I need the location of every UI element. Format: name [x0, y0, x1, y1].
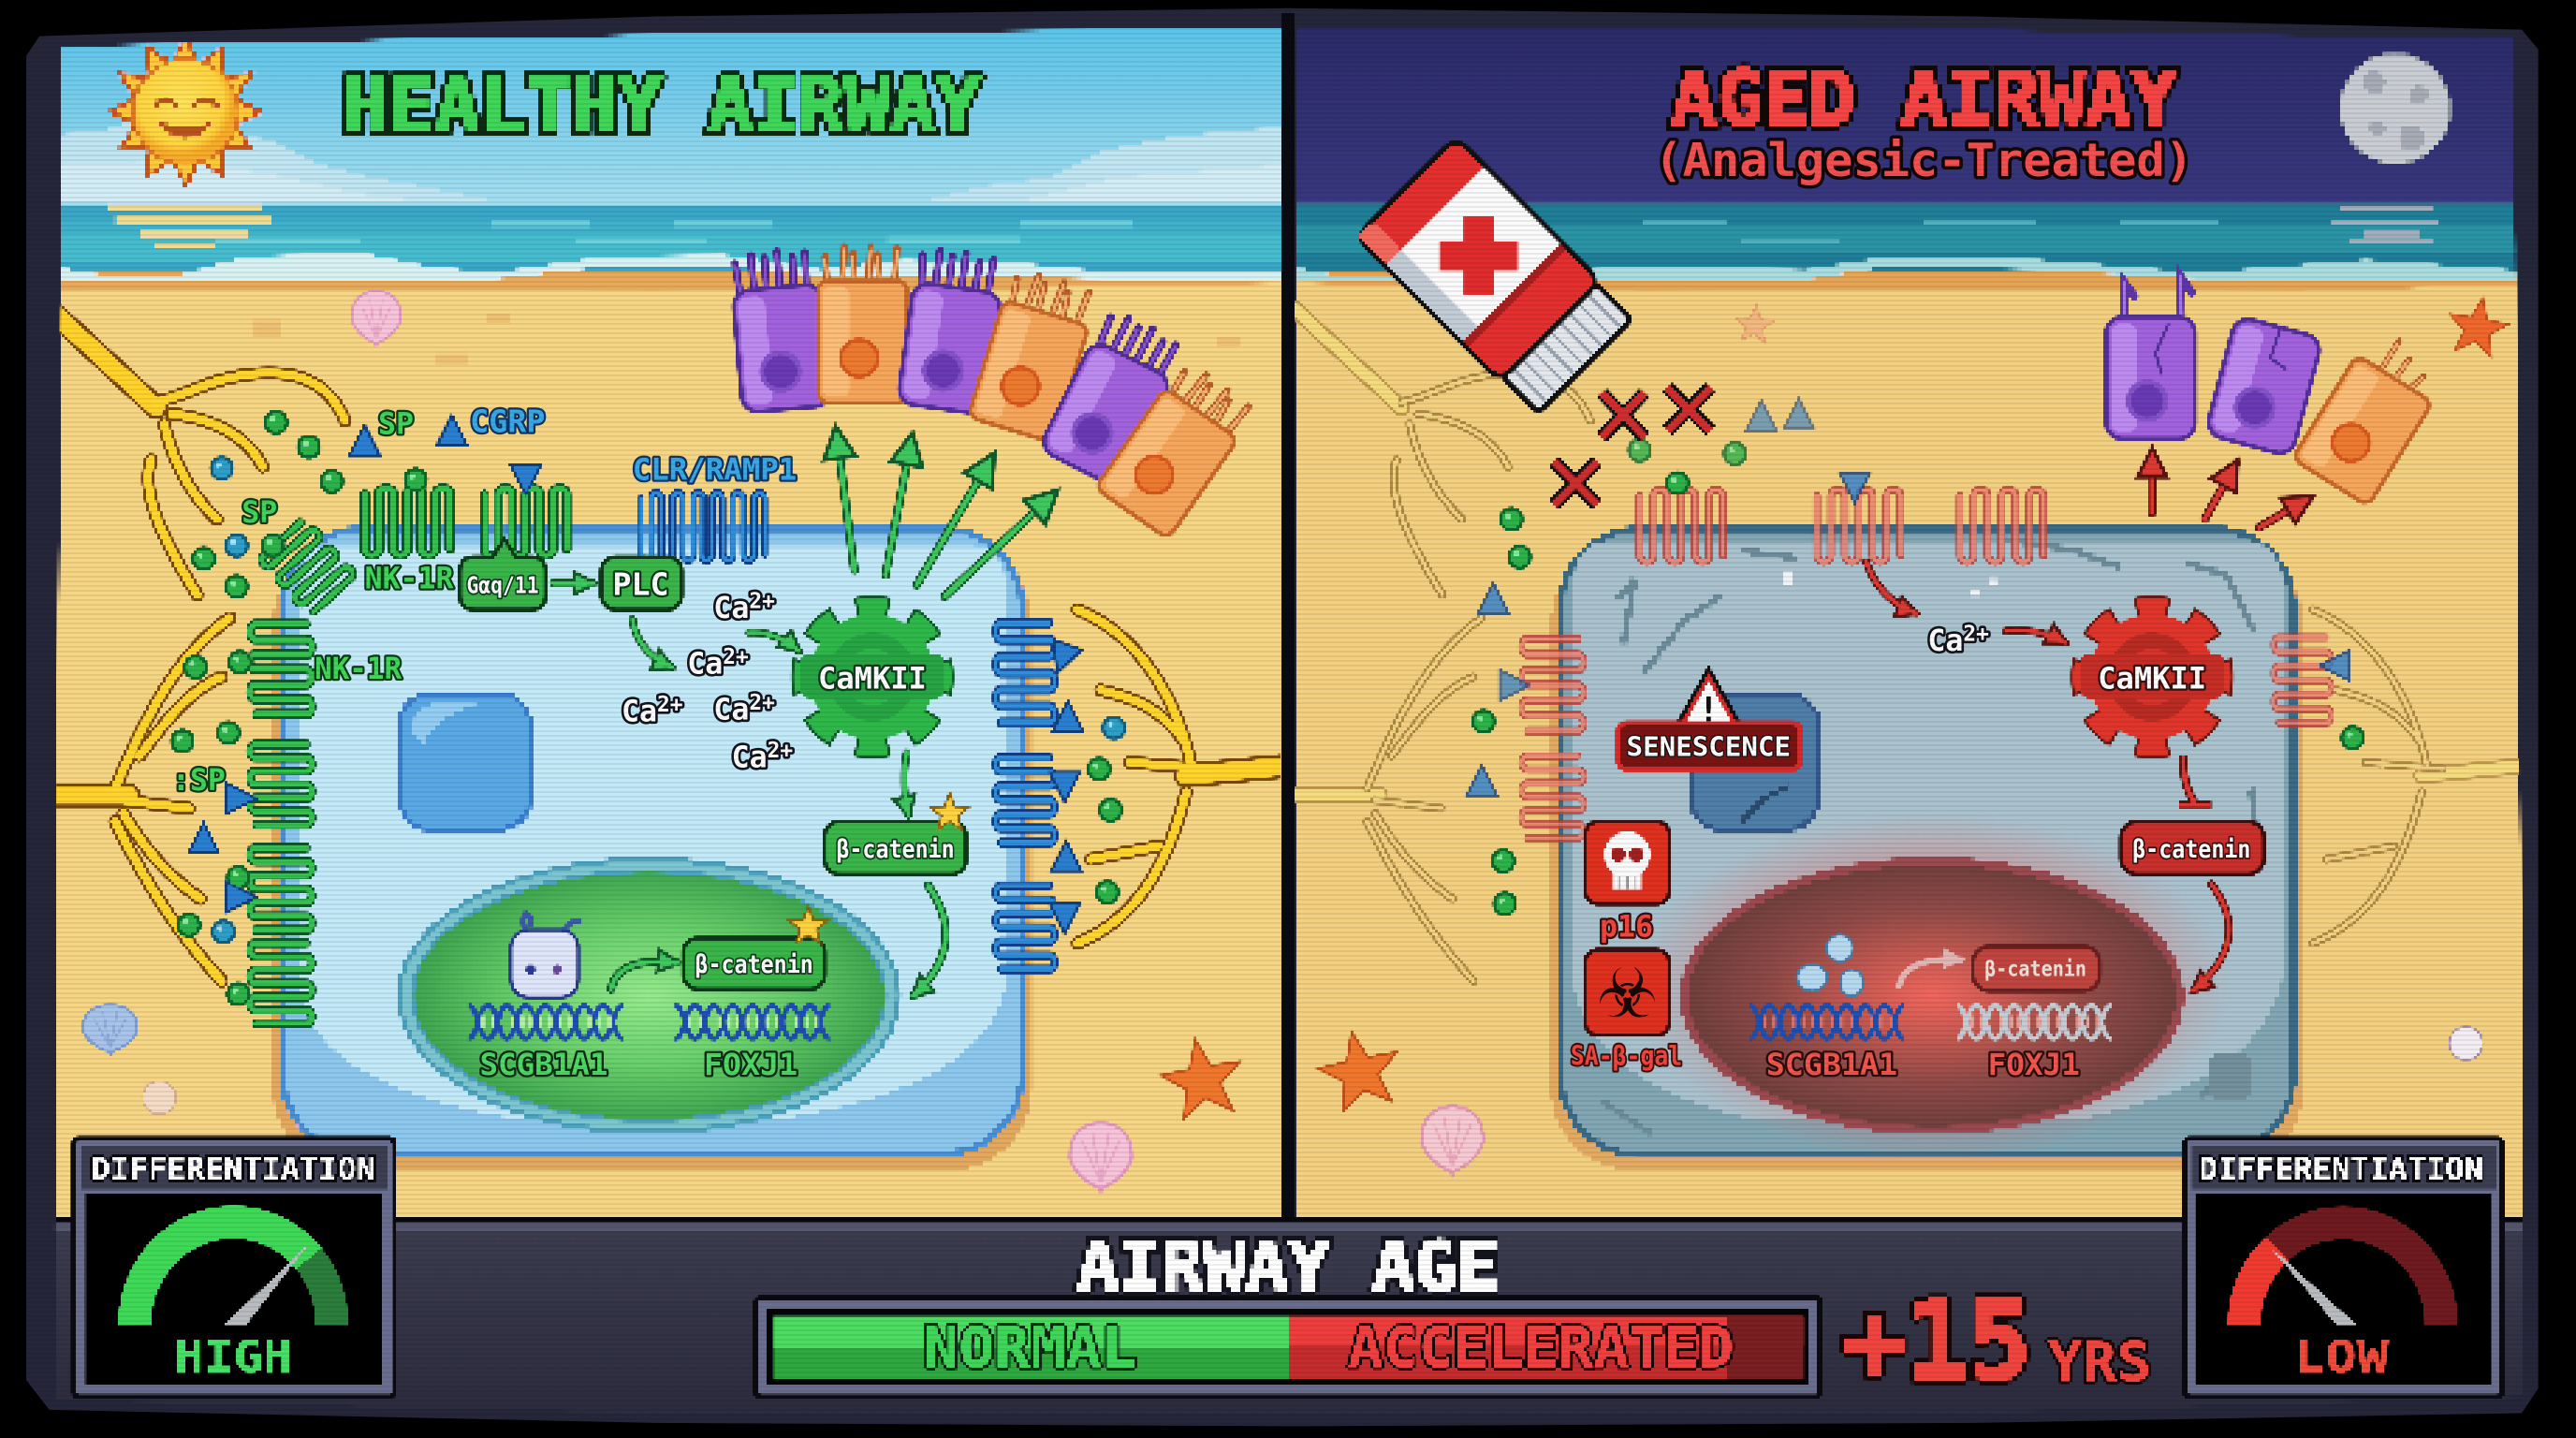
- red crosses: [1554, 388, 1710, 505]
- senescent nucleus: [1684, 861, 2180, 1131]
- sea: [33, 204, 1298, 286]
- label: PLC: PLC: [612, 565, 669, 602]
- icon: bottle of analgesic: [1356, 137, 1635, 416]
- label: NK-1R left: NK-1R: [315, 653, 402, 686]
- glow around nucleus: [1633, 812, 2231, 1160]
- icon: skull badge: [1586, 822, 1669, 903]
- label: G alpha q/11: Gαq/11: [466, 572, 539, 599]
- vacuole: [399, 694, 531, 829]
- healthy airway cell: [272, 529, 1032, 1170]
- label: NK-1R top: NK-1R: [365, 562, 454, 595]
- ciliated and club cells: [729, 246, 1257, 538]
- stat: +15: +15: [1842, 1279, 2031, 1405]
- calcium labels: Ca: [622, 695, 657, 728]
- senescent vacuole: [1690, 694, 1819, 829]
- calcium labels: 2+: [723, 645, 749, 669]
- panel: aged airway: [1290, 17, 2554, 1229]
- label: aged Ca2+: 2+: [1963, 622, 1989, 646]
- arrows: aged pathway: [1866, 562, 2229, 990]
- label: Differentiation right: DIFFERENTIATION: [2199, 1151, 2483, 1187]
- receptors: NK-1R and CLR/RAMP1: [250, 488, 1055, 1023]
- centre divider: [1281, 13, 1295, 1225]
- label: FOXJ1: FOXJ1: [704, 1049, 798, 1082]
- gauge: aged differentiation: [2185, 1138, 2502, 1397]
- gear: CaMKII: [800, 609, 944, 744]
- label: faded nuclear beta-catenin: β-catenin: [1984, 958, 2086, 982]
- label: SA-beta-gal: SA-β-gal: [1571, 1040, 1682, 1071]
- label: p16: p16: [1600, 910, 1653, 944]
- neuropeptide dots: [170, 410, 1126, 1006]
- label: CLR/RAMP1: CLR/RAMP1: [633, 453, 797, 487]
- faded receptors: [1522, 490, 2331, 838]
- CGRP triangles: [189, 416, 1083, 933]
- label: SCGB1A1: SCGB1A1: [479, 1049, 607, 1082]
- damaged cells: [2106, 276, 2451, 506]
- label: aged CaMKII: CaMKII: [2098, 662, 2206, 696]
- calcium labels: Ca: [713, 694, 749, 727]
- warning mark: !: [1698, 689, 1719, 729]
- SCGB1A1 protein: [511, 914, 581, 997]
- label: Differentiation left: DIFFERENTIATION: [91, 1151, 375, 1187]
- label: CaMKII: CaMKII: [818, 662, 927, 696]
- stars: [789, 794, 969, 943]
- bottom dashboard: [54, 1138, 2524, 1413]
- DNA: SCGB1A1 and FOXJ1: [468, 1005, 829, 1038]
- biohazard badge: [1586, 949, 1669, 1035]
- label: aged SCGB1A1: SCGB1A1: [1766, 1049, 1897, 1082]
- faint nuclear arrow: [1899, 960, 1962, 986]
- calcium labels: Ca: [732, 741, 768, 775]
- nerve: upper left: [50, 309, 345, 594]
- label: beta-catenin nucleus: β-catenin: [695, 951, 813, 979]
- calcium labels: 2+: [657, 693, 683, 717]
- dashboard strip: [54, 1218, 2524, 1413]
- daytime sky: [33, 17, 1298, 205]
- DNA: aged genes: [1749, 1005, 2111, 1038]
- calcium labels: Ca: [687, 648, 723, 682]
- sand: [33, 253, 1298, 1229]
- label: Accelerated: ACCELERATED: [1348, 1316, 1734, 1381]
- label: HIGH: HIGH: [174, 1332, 292, 1384]
- beach shells and starfish, night: [1313, 293, 2511, 1176]
- faded nerves: [1295, 309, 2525, 981]
- night sea: [1290, 204, 2554, 286]
- gear: aged CaMKII: [2080, 609, 2224, 744]
- arrows: reduced differentiation: [2152, 452, 2310, 527]
- icon: biohazard symbol: ☣: [1596, 954, 1658, 1034]
- label: beta-catenin cytoplasm: β-catenin: [836, 836, 955, 864]
- pills: G protein, PLC, beta-catenin: [460, 539, 966, 990]
- label: Normal: NORMAL: [923, 1316, 1137, 1381]
- calcium labels: 2+: [749, 589, 775, 613]
- icon: smiling sun: [110, 37, 261, 185]
- reduced dots and triangles: [1467, 399, 2364, 916]
- label: SP: SP: [378, 407, 414, 441]
- title: Healthy Airway: HEALTHY AIRWAY: [344, 62, 981, 150]
- nerve: right: [1077, 609, 1290, 943]
- icon: warning triangle: [1679, 674, 1738, 726]
- night sky: [1290, 17, 2554, 205]
- droplets: [1797, 935, 1863, 996]
- label: aged beta-catenin: β-catenin: [2132, 836, 2250, 864]
- beach shells and starfish: [83, 291, 1248, 1193]
- label: SP near nerve: SP: [242, 496, 277, 530]
- heading: Airway Age: AIRWAY AGE: [1076, 1227, 1500, 1306]
- senescence tag: [1618, 723, 1801, 769]
- airway age bar: [755, 1299, 1821, 1397]
- gauge: healthy differentiation: [74, 1138, 394, 1397]
- label: aged FOXJ1: FOXJ1: [1988, 1049, 2080, 1082]
- label: CGRP: CGRP: [470, 404, 545, 440]
- calcium labels: 2+: [749, 691, 775, 715]
- label: SP lower: :SP: [172, 764, 226, 798]
- calcium labels: 2+: [768, 739, 793, 763]
- inhibition line: [2178, 756, 2211, 805]
- icon: moon: [2340, 53, 2451, 164]
- panel: healthy airway: [33, 17, 1298, 1229]
- night sand: [1290, 257, 2554, 1229]
- label: aged Ca2+: Ca: [1927, 624, 1963, 658]
- label: YRS: YRS: [2048, 1329, 2151, 1393]
- calcium labels: [622, 589, 793, 775]
- nucleus: [399, 859, 899, 1132]
- label: LOW: LOW: [2293, 1332, 2389, 1384]
- arrows: differentiation: [836, 431, 1055, 596]
- arrows: signalling pathway: [553, 583, 945, 996]
- title: Aged Airway: AGED AIRWAY: [1671, 55, 2177, 143]
- subtitle: Analgesic-Treated: (Analgesic-Treated): [1654, 133, 2193, 187]
- calcium labels: Ca: [713, 592, 749, 625]
- aged airway cell: [1551, 529, 2304, 1170]
- label: SENESCENCE: SENESCENCE: [1627, 731, 1791, 762]
- pills: aged beta-catenin: [1973, 822, 2264, 990]
- nerve: lower left: [43, 618, 230, 981]
